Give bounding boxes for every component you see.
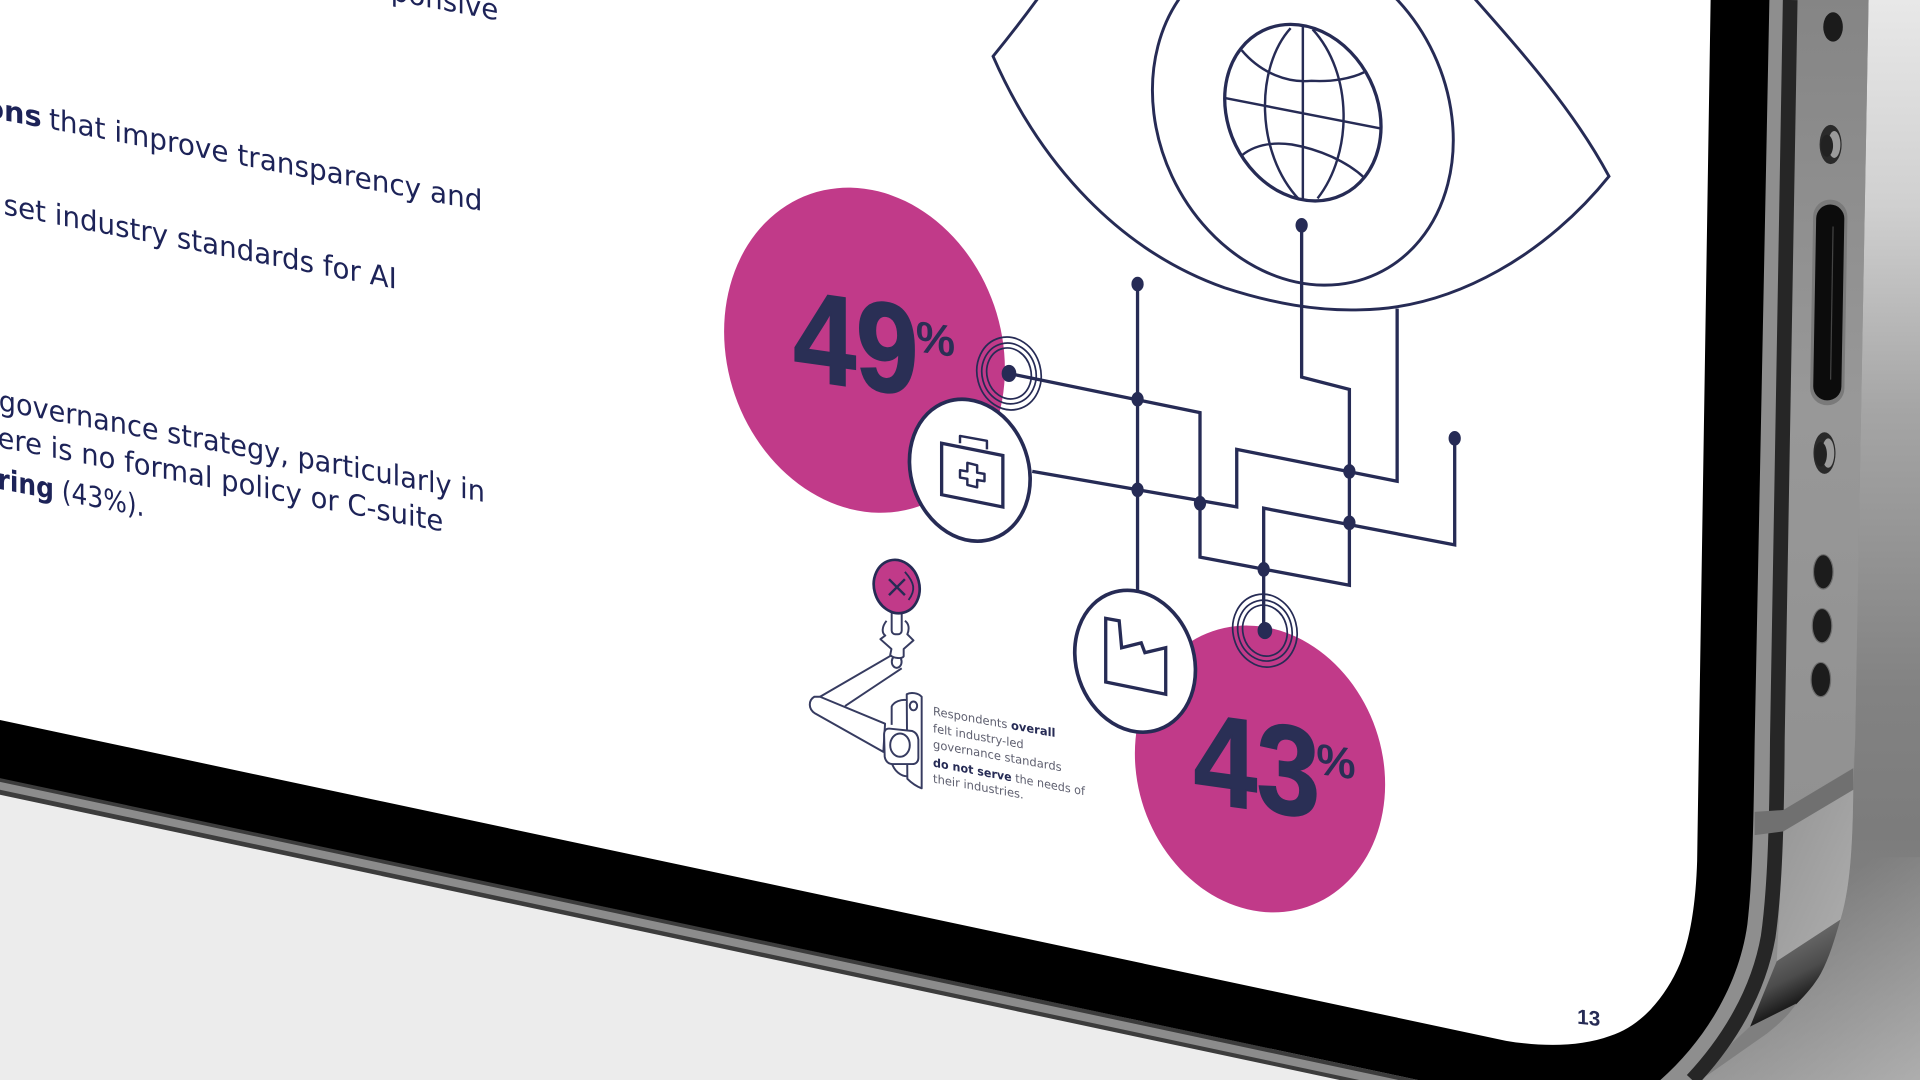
text line: industry standards: set industry standards for AI	[4, 188, 397, 296]
icon: factory in circle	[1056, 574, 1214, 749]
percent sign: %	[916, 313, 955, 367]
stat: 43 percent: 43	[1194, 686, 1320, 846]
phone bottom rim	[0, 778, 1418, 1080]
phone port and speaker details	[1810, 12, 1848, 697]
upper screw	[1820, 125, 1842, 164]
text line: 43 percent: ring (43%).	[0, 462, 144, 523]
background shadow at right	[1592, 0, 1920, 1080]
target rings at 49 percent	[969, 330, 1049, 417]
icon: medical case in circle	[891, 383, 1049, 558]
icon: robot arm holding sign	[810, 555, 926, 788]
lower screw	[1813, 432, 1836, 474]
text line: transparency: that improve transparency and	[49, 102, 482, 218]
speaker holes	[1811, 555, 1833, 697]
charging port	[1810, 199, 1848, 406]
percent sign: %	[1316, 735, 1355, 789]
caption line 1: Respondents overall	[933, 704, 1056, 740]
base plate and arm	[810, 655, 922, 788]
pink circle: 43 percent	[1097, 591, 1423, 947]
caption: industry-led standards	[933, 704, 1086, 802]
corner wedge	[1750, 920, 1840, 1027]
circuit lines	[1009, 218, 1461, 631]
caption line 3: governance standards	[933, 737, 1062, 774]
caption line 4: do not serve the needs of	[933, 756, 1086, 798]
top speaker hole	[1823, 12, 1843, 42]
phone metal side	[1641, 0, 1869, 1080]
page number: 13	[1577, 1006, 1600, 1031]
caption line 2: felt industry-led	[933, 721, 1024, 752]
globe	[1196, 0, 1410, 227]
eye outline	[993, 0, 1609, 310]
iris	[1098, 0, 1508, 335]
illustration: eye with globe	[993, 0, 1609, 335]
target rings at 43 percent	[1225, 587, 1305, 674]
antenna band	[1755, 768, 1853, 835]
corner lower face	[1695, 1003, 1796, 1080]
pink circle: 49 percent	[681, 149, 1048, 551]
caption line 5: their industries.	[933, 772, 1024, 802]
text line: formal policy: ere is no formal policy or C-suite	[0, 420, 443, 539]
lower side face	[1777, 790, 1853, 961]
upper side face	[1783, 0, 1869, 810]
gripper	[880, 610, 913, 658]
dark groove	[1692, 0, 1790, 1080]
body text	[0, 0, 498, 539]
connector end dots and nodes	[1131, 218, 1461, 577]
stat: 49 percent: 49	[793, 264, 918, 424]
text line: governance strategy: governance strategy, particularly in	[0, 383, 485, 509]
sign with cross	[868, 555, 926, 618]
